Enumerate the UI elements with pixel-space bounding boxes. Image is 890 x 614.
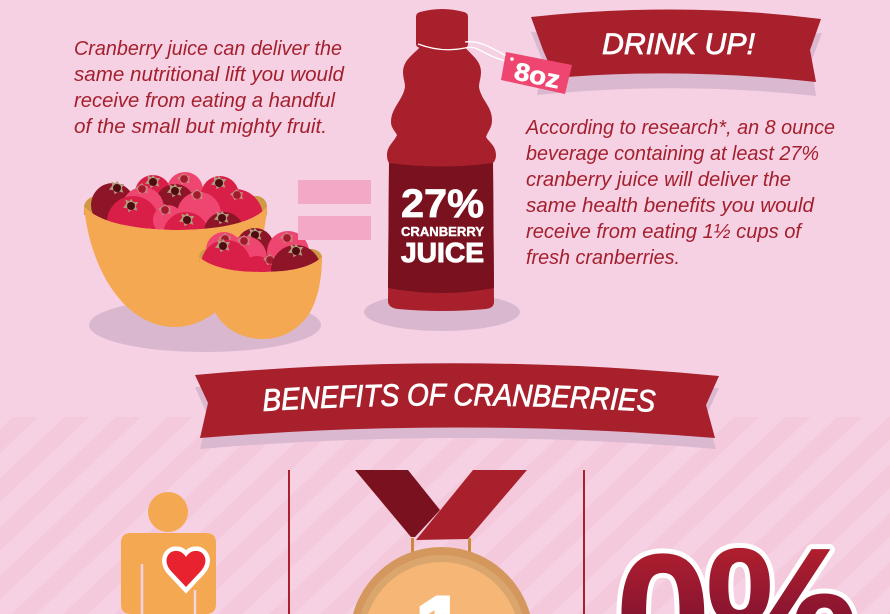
medal loop: [412, 538, 470, 556]
size tag: 8oz: 8oz: [512, 57, 563, 94]
bottle body: [387, 47, 496, 311]
shadow: benefits banner: [195, 380, 719, 449]
bottle shadow: [364, 293, 520, 331]
label text: 27%: [401, 182, 484, 226]
intro text: left: [74, 38, 345, 138]
big stat: 0%: [615, 513, 858, 614]
illustration: bowls of cranberries: [84, 172, 322, 352]
icon: person with heart: [121, 492, 216, 614]
label text: [401, 182, 484, 268]
banner: benefits of cranberries: [195, 363, 719, 438]
banner heading: drink up: DRINK UP!: [602, 28, 756, 61]
bowl shadow: [89, 298, 321, 352]
medal disc: [350, 547, 534, 614]
bottle label: [388, 163, 494, 293]
research text: right: receive from eating 1½ cups of: [526, 221, 803, 243]
bottle tag string: [418, 42, 510, 62]
intro text: left: same nutritional lift you would: [74, 64, 345, 86]
size tag: 8oz: [501, 52, 572, 94]
research text: right: beverage containing at least 27%: [526, 143, 819, 165]
illustration: juice bottle: [364, 9, 520, 331]
icon: medal: [350, 470, 534, 614]
banner heading: benefits of cranberries: BENEFITS OF CRANBERRIES: [263, 383, 656, 412]
heart: [167, 551, 205, 587]
intro text: left: receive from eating a handful: [74, 90, 336, 112]
research text: right: According to research*, an 8 ounce: [525, 117, 835, 139]
small bowl: [199, 228, 322, 339]
research text: right: cranberry juice will deliver the: [526, 169, 791, 191]
shadow: drink up banner: [531, 32, 822, 96]
label text: JUICE: [401, 237, 484, 268]
column dividers: [288, 470, 585, 614]
research text: right: same health benefits you would: [526, 195, 815, 217]
striped lower panel: [0, 417, 890, 614]
medal ribbon: [355, 470, 440, 537]
banner: drink up: [531, 9, 821, 82]
label text: CRANBERRY: [401, 224, 484, 239]
research text: right: fresh cranberries.: [526, 247, 680, 269]
research text: right: [525, 117, 835, 269]
bottle cap: [416, 9, 468, 48]
intro text: left: Cranberry juice can deliver the: [74, 38, 342, 60]
equals sign: [298, 180, 371, 240]
intro text: left: of the small but mighty fruit.: [74, 116, 327, 138]
large bowl: [84, 172, 267, 327]
